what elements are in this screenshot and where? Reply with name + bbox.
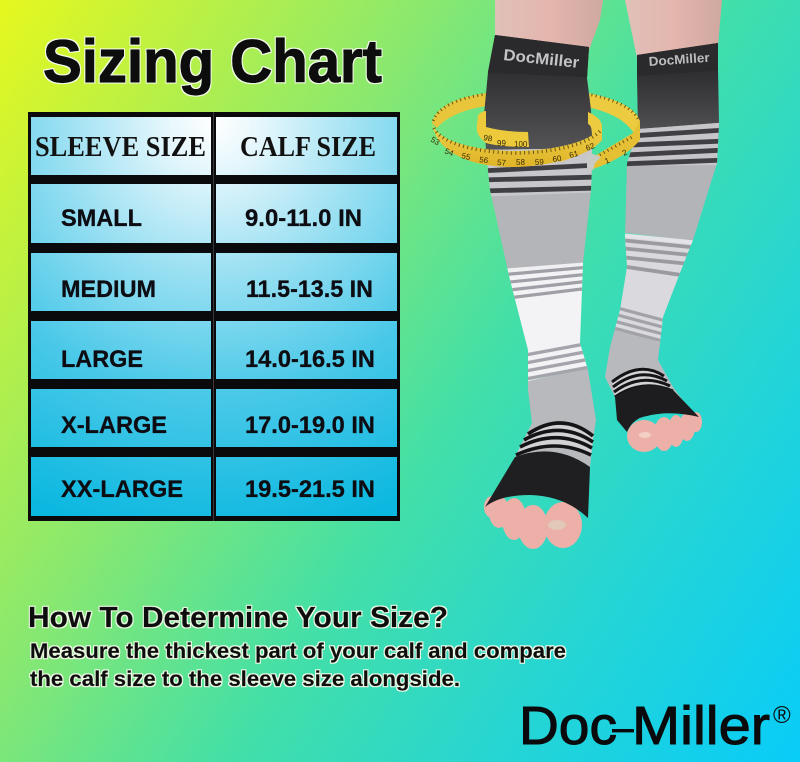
tape right curl (553, 112, 602, 162)
row: small (31, 184, 397, 243)
tape numbers: 59 (535, 158, 545, 167)
tape numbers: 57 (497, 158, 507, 167)
left foot stripes (516, 423, 593, 455)
instructions text: Measure the thickest part of your calf and compare (30, 639, 566, 663)
tape measure front section (429, 111, 640, 170)
tape numbers: 53 (429, 135, 442, 147)
tape inner curl with numbers (477, 111, 529, 149)
right foot stripes (612, 369, 673, 397)
right sleeve logo: DocMiller (648, 50, 710, 69)
sizing table (28, 112, 400, 521)
header row: SLEEVE SIZE (35, 132, 206, 163)
brand logo (519, 696, 791, 756)
title: Sizing Chart (43, 28, 382, 95)
tape numbers: 62 (584, 141, 597, 153)
tape right end (593, 120, 640, 169)
row: small: SMALL (61, 205, 142, 232)
row: x-large: 17.0-19.0 IN (245, 412, 375, 439)
tape right end: 2 (621, 147, 629, 158)
brand logo: Doc (519, 696, 617, 756)
table frame (28, 112, 400, 521)
tape numbers: 61 (568, 149, 580, 160)
row: xx-large: 19.5-21.5 IN (245, 476, 375, 503)
tape numbers: 55 (461, 151, 472, 162)
row: x-large (31, 389, 397, 447)
row: medium: 11.5-13.5 IN (246, 276, 373, 303)
row: x-large: X-LARGE (61, 412, 167, 439)
right toes (627, 412, 702, 452)
tape inner curl with numbers: 99 (497, 139, 506, 148)
left sleeve body (484, 35, 596, 467)
tape main front band (432, 123, 602, 167)
row: small: 9.0-11.0 IN (245, 205, 362, 232)
tape metal buckle (587, 154, 601, 170)
tape tick marks (434, 128, 600, 153)
brand logo: ® (773, 702, 791, 729)
left leg with sleeve (475, 0, 605, 549)
left sleeve logo: DocMiller (503, 47, 580, 72)
row: xx-large (31, 457, 397, 516)
tape inner curl with numbers: 98 (483, 133, 494, 144)
tape inner curl with numbers: 100 (514, 140, 528, 149)
right sleeve body (605, 43, 719, 401)
column divider (213, 112, 214, 521)
row: large: 14.0-16.5 IN (245, 346, 375, 373)
tape numbers (429, 135, 597, 167)
tape numbers: 58 (516, 158, 525, 167)
tape right end: 1 (603, 156, 611, 166)
tape measure back section (432, 93, 640, 136)
row: large: LARGE (61, 346, 143, 373)
left foot black band (485, 451, 590, 518)
row: large (31, 321, 397, 379)
header row: CALF SIZE (240, 132, 376, 163)
right thigh skin (625, 0, 722, 58)
instructions text (30, 639, 566, 691)
left toes (484, 496, 582, 549)
row: xx-large: XX-LARGE (61, 476, 183, 503)
tape numbers: 56 (479, 155, 489, 165)
right leg with sleeve (600, 0, 730, 452)
instructions text: the calf size to the sleeve size alongside. (30, 667, 460, 691)
how to heading: How To Determine Your Size? (28, 602, 448, 634)
right foot black band (615, 385, 699, 432)
row: medium (31, 253, 397, 311)
row: medium: MEDIUM (61, 276, 156, 303)
tape numbers: 60 (552, 154, 563, 164)
header row (31, 117, 397, 175)
brand logo: Miller (632, 696, 770, 756)
left thigh skin (495, 0, 603, 50)
tape numbers: 54 (443, 147, 455, 158)
